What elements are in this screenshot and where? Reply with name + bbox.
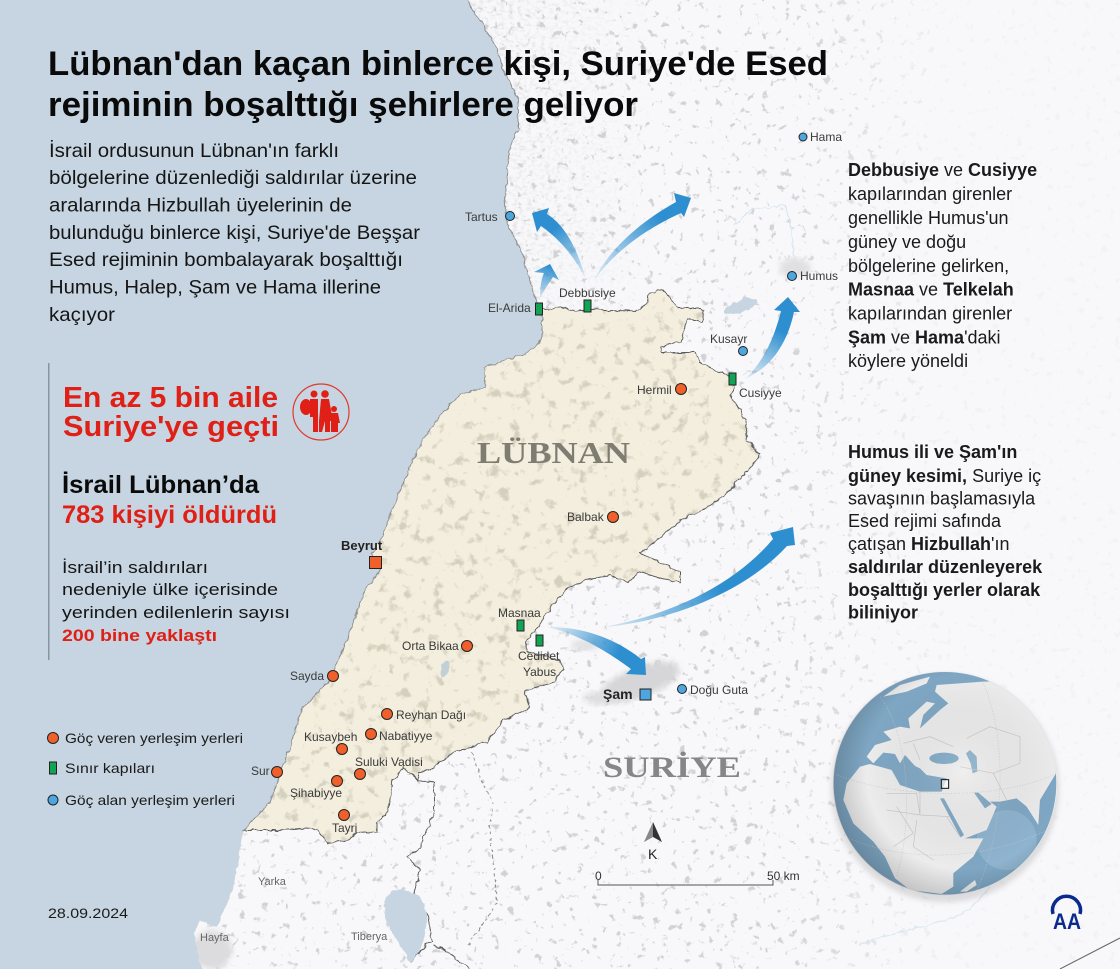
right text block: Hezbollah: biliniyor	[848, 602, 918, 622]
globe location marker	[941, 780, 949, 788]
country label: Lübnan: LÜBNAN	[477, 435, 630, 470]
destination settlements (blue)	[465, 130, 842, 697]
right text block: Hezbollah: boşalttığı yerler olarak	[848, 580, 1041, 600]
origin settlements (orange): Reyhan Dağı	[396, 708, 466, 722]
border gates (green): Yabus	[523, 665, 556, 679]
logo: Anadolu Agency	[1052, 896, 1081, 934]
intro paragraph: İsrail ordusunun Lübnan'ın farklı	[49, 139, 339, 162]
capital: Sam: Şam	[603, 686, 633, 702]
minor place labels: Yarka	[258, 876, 287, 888]
origin settlements (orange)	[251, 383, 686, 835]
origin settlements (orange): Sur	[251, 764, 270, 778]
stat: displaced persons text: 200 bine yaklaştı	[62, 626, 217, 645]
arrow: Debbusiye to Tartus	[532, 208, 586, 280]
minor place labels	[200, 876, 388, 944]
headline: 5 bin aile: En az 5 bin aile	[63, 382, 278, 414]
logo: Anadolu Agency: AA	[1053, 909, 1081, 934]
arrow: El-Arida north	[534, 264, 559, 298]
origin settlements (orange): Suluki Vadisi	[355, 755, 423, 769]
scale bar: 50 km	[767, 869, 800, 883]
country label: Suriye: SURİYE	[603, 751, 741, 784]
origin settlements (orange): Şihabiyye	[290, 786, 342, 800]
border gates (green): Cusiyye	[739, 386, 782, 400]
right text block: Hezbollah: çatışan Hizbullah'ın	[848, 534, 1010, 554]
right text block: crossings: Debbusiye ve Cusiyye	[848, 160, 1037, 180]
destination settlements (blue): Doğu Guta	[690, 683, 748, 697]
border gates (green): Cedidet	[518, 649, 560, 663]
legend	[48, 730, 243, 808]
right text block: crossings: Şam ve Hama'daki	[848, 328, 1001, 348]
stat: 783 killed	[62, 471, 277, 529]
origin settlements (orange): Orta Bikaa	[402, 639, 459, 653]
corner border line	[1060, 938, 1120, 969]
right text block: Hezbollah: Esed rejimi safında	[848, 511, 1002, 531]
stat: 783 killed: 783 kişiyi öldürdü	[62, 501, 277, 529]
intro paragraph: aralarında Hizbullah üyelerinin de	[49, 194, 352, 216]
right text block: crossings: bölgelerine gelirken,	[848, 256, 1009, 276]
intro paragraph: Humus, Halep, Şam ve Hama illerine	[49, 276, 381, 298]
border gates (green): Masnaa	[498, 606, 541, 620]
right text block: Hezbollah: güney kesimi, Suriye iç	[848, 466, 1041, 486]
right text block: crossings: kapılarından girenler	[848, 304, 1012, 324]
intro paragraph: Esed rejiminin bombalayarak boşalttığı	[49, 249, 403, 271]
title: Lübnan'dan kaçan binlerce kişi, Suriye'de Esed	[48, 45, 828, 83]
minor place labels: Tiberya	[351, 931, 388, 943]
right text block: crossings: kapılarından girenler	[848, 184, 1012, 204]
locator globe	[831, 671, 1073, 902]
arrow: Debbusiye to Syria interior	[593, 193, 691, 282]
destination settlements (blue): Humus	[800, 269, 838, 283]
scale bar: 0	[595, 869, 602, 883]
right text block: Hezbollah: savaşının başlamasıyla	[848, 488, 1036, 508]
destination settlements (blue): Tartus	[465, 210, 498, 224]
arrow: Masnaa to Sam	[547, 627, 646, 675]
headline: 5 bin aile: Suriye'ye geçti	[63, 411, 279, 443]
capital: Sam	[603, 686, 651, 702]
headline: 5 bin aile	[63, 382, 279, 443]
right text block: Hezbollah	[848, 442, 1043, 622]
right text block: Hezbollah: Humus ili ve Şam'ın	[848, 442, 1017, 462]
capital: Beyrut	[341, 538, 383, 568]
stat: displaced persons text	[62, 558, 290, 645]
origin settlements (orange): Kusaybeh	[304, 730, 357, 744]
right text block: crossings: güney ve doğu	[848, 232, 966, 252]
migration arrows	[532, 193, 800, 675]
minor place labels: Hayfa	[200, 932, 230, 944]
country borders	[243, 0, 760, 969]
right text block: crossings: köylere yöneldi	[848, 351, 968, 371]
callout panel: statistics	[48, 363, 349, 660]
stat: displaced persons text: nedeniyle ülke içerisinde	[62, 580, 278, 599]
border gates (green): El-Arida	[488, 301, 531, 315]
title: rejiminin boşalttığı şehirlere geliyor	[48, 86, 638, 124]
stat: 783 killed: İsrail Lübnan’da	[62, 471, 260, 499]
right text block: crossings: genellikle Humus'un	[848, 208, 1009, 228]
intro paragraph	[49, 139, 421, 326]
globe land	[843, 680, 1073, 894]
stat: displaced persons text: yerinden edilenlerin sayısı	[62, 603, 290, 622]
origin settlements (orange): Balbak	[567, 510, 605, 524]
right text block: crossings	[848, 160, 1037, 371]
destination settlements (blue): Hama	[810, 130, 842, 144]
stat: displaced persons text: İsrail’in saldırıları	[62, 558, 208, 577]
right text block: crossings: Masnaa ve Telkelah	[848, 280, 1014, 300]
origin settlements (orange): Hermil	[637, 383, 672, 397]
origin settlements (orange): Sayda	[290, 669, 324, 683]
origin settlements (orange): Tayri	[332, 821, 357, 835]
Lebanon territory	[240, 280, 770, 850]
right text block: Hezbollah: saldırılar düzenleyerek	[848, 557, 1043, 577]
capital: Beyrut: Beyrut	[341, 538, 383, 553]
arrow: Cusiyye to Humus	[745, 297, 800, 379]
title	[48, 45, 828, 124]
legend: Sınır kapıları	[65, 760, 155, 776]
legend: Göç alan yerleşim yerleri	[65, 792, 235, 808]
scale bar	[595, 869, 800, 885]
lakes and rivers	[384, 205, 1000, 962]
origin settlements (orange): Nabatiyye	[379, 729, 433, 743]
north arrow	[644, 822, 662, 862]
destination settlements (blue): Kusayr	[710, 332, 747, 346]
icon: migrating family	[293, 384, 349, 440]
intro paragraph: bölgelerine düzenlediği saldırılar üzerine	[49, 167, 417, 189]
globe inland seas	[929, 753, 959, 764]
north arrow: K	[648, 846, 658, 862]
border gates (green): Debbusiye	[559, 286, 616, 300]
arrow: Masnaa to northeast	[597, 527, 795, 628]
date: 28.09.2024	[48, 905, 128, 921]
intro paragraph: bulunduğu binlerce kişi, Suriye'de Beşşar	[49, 222, 421, 244]
border gates (green)	[488, 286, 782, 679]
legend: Göç veren yerleşim yerleri	[65, 730, 243, 746]
intro paragraph: kaçıyor	[49, 304, 116, 326]
